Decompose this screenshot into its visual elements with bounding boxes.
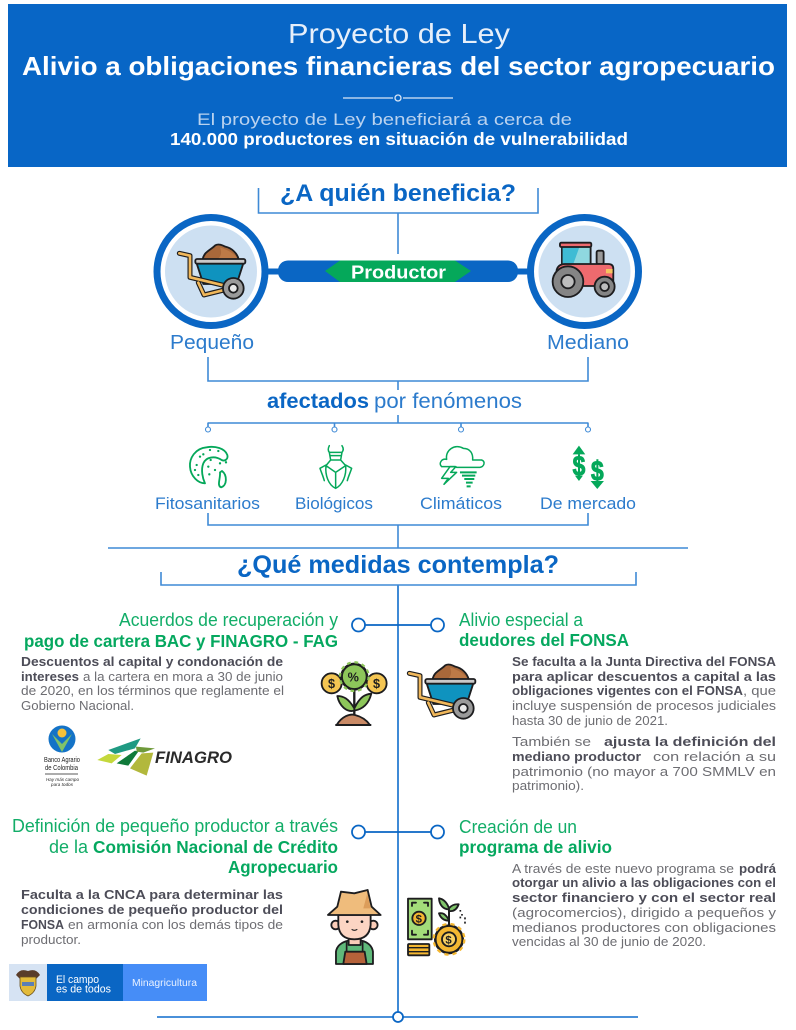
subtitle: El proyecto de Ley beneficiará a cerca de <box>197 110 572 129</box>
text block: A través de este nuevo programa se <box>512 861 734 876</box>
logo: minagricultura <box>9 964 207 1001</box>
labels: phenomena: Fitosanitarios <box>155 494 260 513</box>
text block <box>21 887 283 947</box>
title <box>22 18 775 81</box>
heading: programa de alivio <box>459 837 612 857</box>
icon: tractor <box>553 243 615 297</box>
bar <box>278 260 518 282</box>
heading: de la <box>49 837 89 857</box>
text block: otorgar un alivio a las obligaciones con el <box>512 875 776 890</box>
text block: obligaciones vigentes con el FONSA <box>512 683 744 698</box>
heading: pago de cartera BAC y FINAGRO - FAG <box>24 631 338 651</box>
icon: money and gear: $ <box>445 935 452 947</box>
logo: minagricultura: Minagricultura <box>132 978 197 989</box>
text block: patrimonio (no mayor a 700 SMMLV en <box>512 764 776 779</box>
text block: FONSA <box>21 917 65 932</box>
label: pequeño: Pequeño <box>170 332 254 354</box>
logo: banco agrario <box>44 726 80 787</box>
text block: sector financiero y con el sector real <box>512 890 776 905</box>
label: productor <box>325 260 471 282</box>
logo: banco agrario: de Colombia <box>45 765 78 772</box>
labels: phenomena: De mercado <box>540 494 636 513</box>
icon: farmer <box>328 890 381 964</box>
heading: afectados por fenómenos: por fenómenos <box>374 390 522 413</box>
heading <box>459 610 629 650</box>
text block: incluye suspensión de procesos judiciales <box>512 698 777 713</box>
logo: minagricultura: El campo <box>56 974 99 986</box>
labels: phenomena: Climáticos <box>420 494 502 513</box>
heading: afectados por fenómenos <box>267 390 522 413</box>
title: Proyecto de Ley <box>288 18 510 49</box>
header banner <box>8 4 787 167</box>
text block: podrá <box>739 861 777 876</box>
title: Alivio a obligaciones financieras del sector agropecuario <box>22 51 775 81</box>
panel: alivio especial FONSA <box>409 610 777 793</box>
text block: con relación a su <box>653 749 776 764</box>
icon: plant with coins <box>322 663 387 725</box>
icon: climáticos <box>440 447 484 486</box>
logo: finagro <box>97 738 232 776</box>
text block: Se faculta a la Junta Directiva del FONSA <box>512 654 777 669</box>
icon: de mercado: $ <box>591 455 604 486</box>
icon: plant with coins: $ <box>373 677 380 691</box>
icon: wheelbarrow <box>409 664 475 719</box>
heading: Alivio especial a <box>459 610 584 630</box>
text block: intereses <box>21 669 79 684</box>
phenomena icons <box>190 446 604 489</box>
subtitle <box>170 110 628 149</box>
heading: Definición de pequeño productor a través <box>12 816 338 836</box>
text block: mediano productor <box>512 749 641 764</box>
diagram: productor <box>157 218 638 326</box>
text block: Gobierno Nacional. <box>21 698 134 713</box>
heading: Comisión Nacional de Crédito <box>93 837 338 857</box>
icon: plant with coins: $ <box>328 677 335 691</box>
heading <box>459 817 612 857</box>
icon: money and gear: $ <box>416 914 423 926</box>
panel: acuerdos de recuperación <box>21 610 387 787</box>
icon: de mercado <box>573 446 604 489</box>
logo: banco agrario: Hay más campo <box>46 777 79 782</box>
subtitle: 140.000 productores en situación de vulnerabilidad <box>170 129 628 149</box>
text block: a la cartera en mora a 30 de junio <box>83 669 283 684</box>
text block: (agrocomercios), dirigido a pequeños y <box>512 905 777 920</box>
text block: de 2020, en los términos que reglamente el <box>21 683 284 698</box>
circle: pequeño <box>157 218 265 326</box>
icon: money and gear <box>408 898 465 955</box>
logo: banco agrario: para todos <box>50 782 74 787</box>
label: productor: Productor <box>351 262 446 282</box>
text block <box>512 654 777 793</box>
label: mediano: Mediano <box>547 332 629 354</box>
icon: biológicos <box>320 446 352 488</box>
heading: Acuerdos de recuperación y <box>119 610 338 630</box>
labels: phenomena: Biológicos <box>295 494 373 513</box>
text block: medianos productores con obligaciones <box>512 920 777 935</box>
heading: qué medidas contempla: ¿Qué medidas contempla? <box>237 551 559 579</box>
heading: deudores del FONSA <box>459 630 629 650</box>
heading: Agropecuario <box>228 857 338 877</box>
logo: banco agrario: Banco Agrario <box>44 757 80 764</box>
icon: plant with coins: % <box>348 670 359 684</box>
text block <box>512 861 777 949</box>
text block: condiciones de pequeño productor del <box>21 902 283 917</box>
text block: hasta 30 de junio de 2021. <box>512 713 668 728</box>
text block <box>21 654 284 713</box>
text block: en armonía con los demás tipos de <box>68 917 283 932</box>
text block: También se <box>512 734 591 749</box>
timeline nodes <box>352 618 444 838</box>
text block: patrimonio). <box>512 778 584 793</box>
panel: programa de alivio <box>408 817 777 955</box>
text block: , que <box>743 683 776 698</box>
logo: finagro: FINAGRO <box>155 749 232 767</box>
labels: phenomena <box>155 494 636 513</box>
heading <box>24 610 338 651</box>
circle: mediano <box>530 218 638 326</box>
text block: Descuentos al capital y condonación de <box>21 654 283 669</box>
panel: definición de pequeño productor <box>9 816 381 1001</box>
heading: a quién beneficia: ¿A quién beneficia? <box>280 180 516 207</box>
logo: minagricultura: es de todos <box>56 984 111 996</box>
heading <box>12 816 338 877</box>
icon: fitosanitarios <box>190 447 228 487</box>
heading: Creación de un <box>459 817 577 837</box>
icon: coat of arms <box>16 970 40 996</box>
text block: Faculta a la CNCA para determinar las <box>21 887 283 902</box>
text block: ajusta la definición del <box>604 734 776 749</box>
heading: afectados por fenómenos: afectados <box>267 390 369 413</box>
text block: para aplicar descuentos a capital a las <box>512 669 776 684</box>
icon: de mercado: $ <box>573 450 586 481</box>
text block: productor. <box>21 932 81 947</box>
text block: vencidas al 30 de junio de 2020. <box>512 934 706 949</box>
